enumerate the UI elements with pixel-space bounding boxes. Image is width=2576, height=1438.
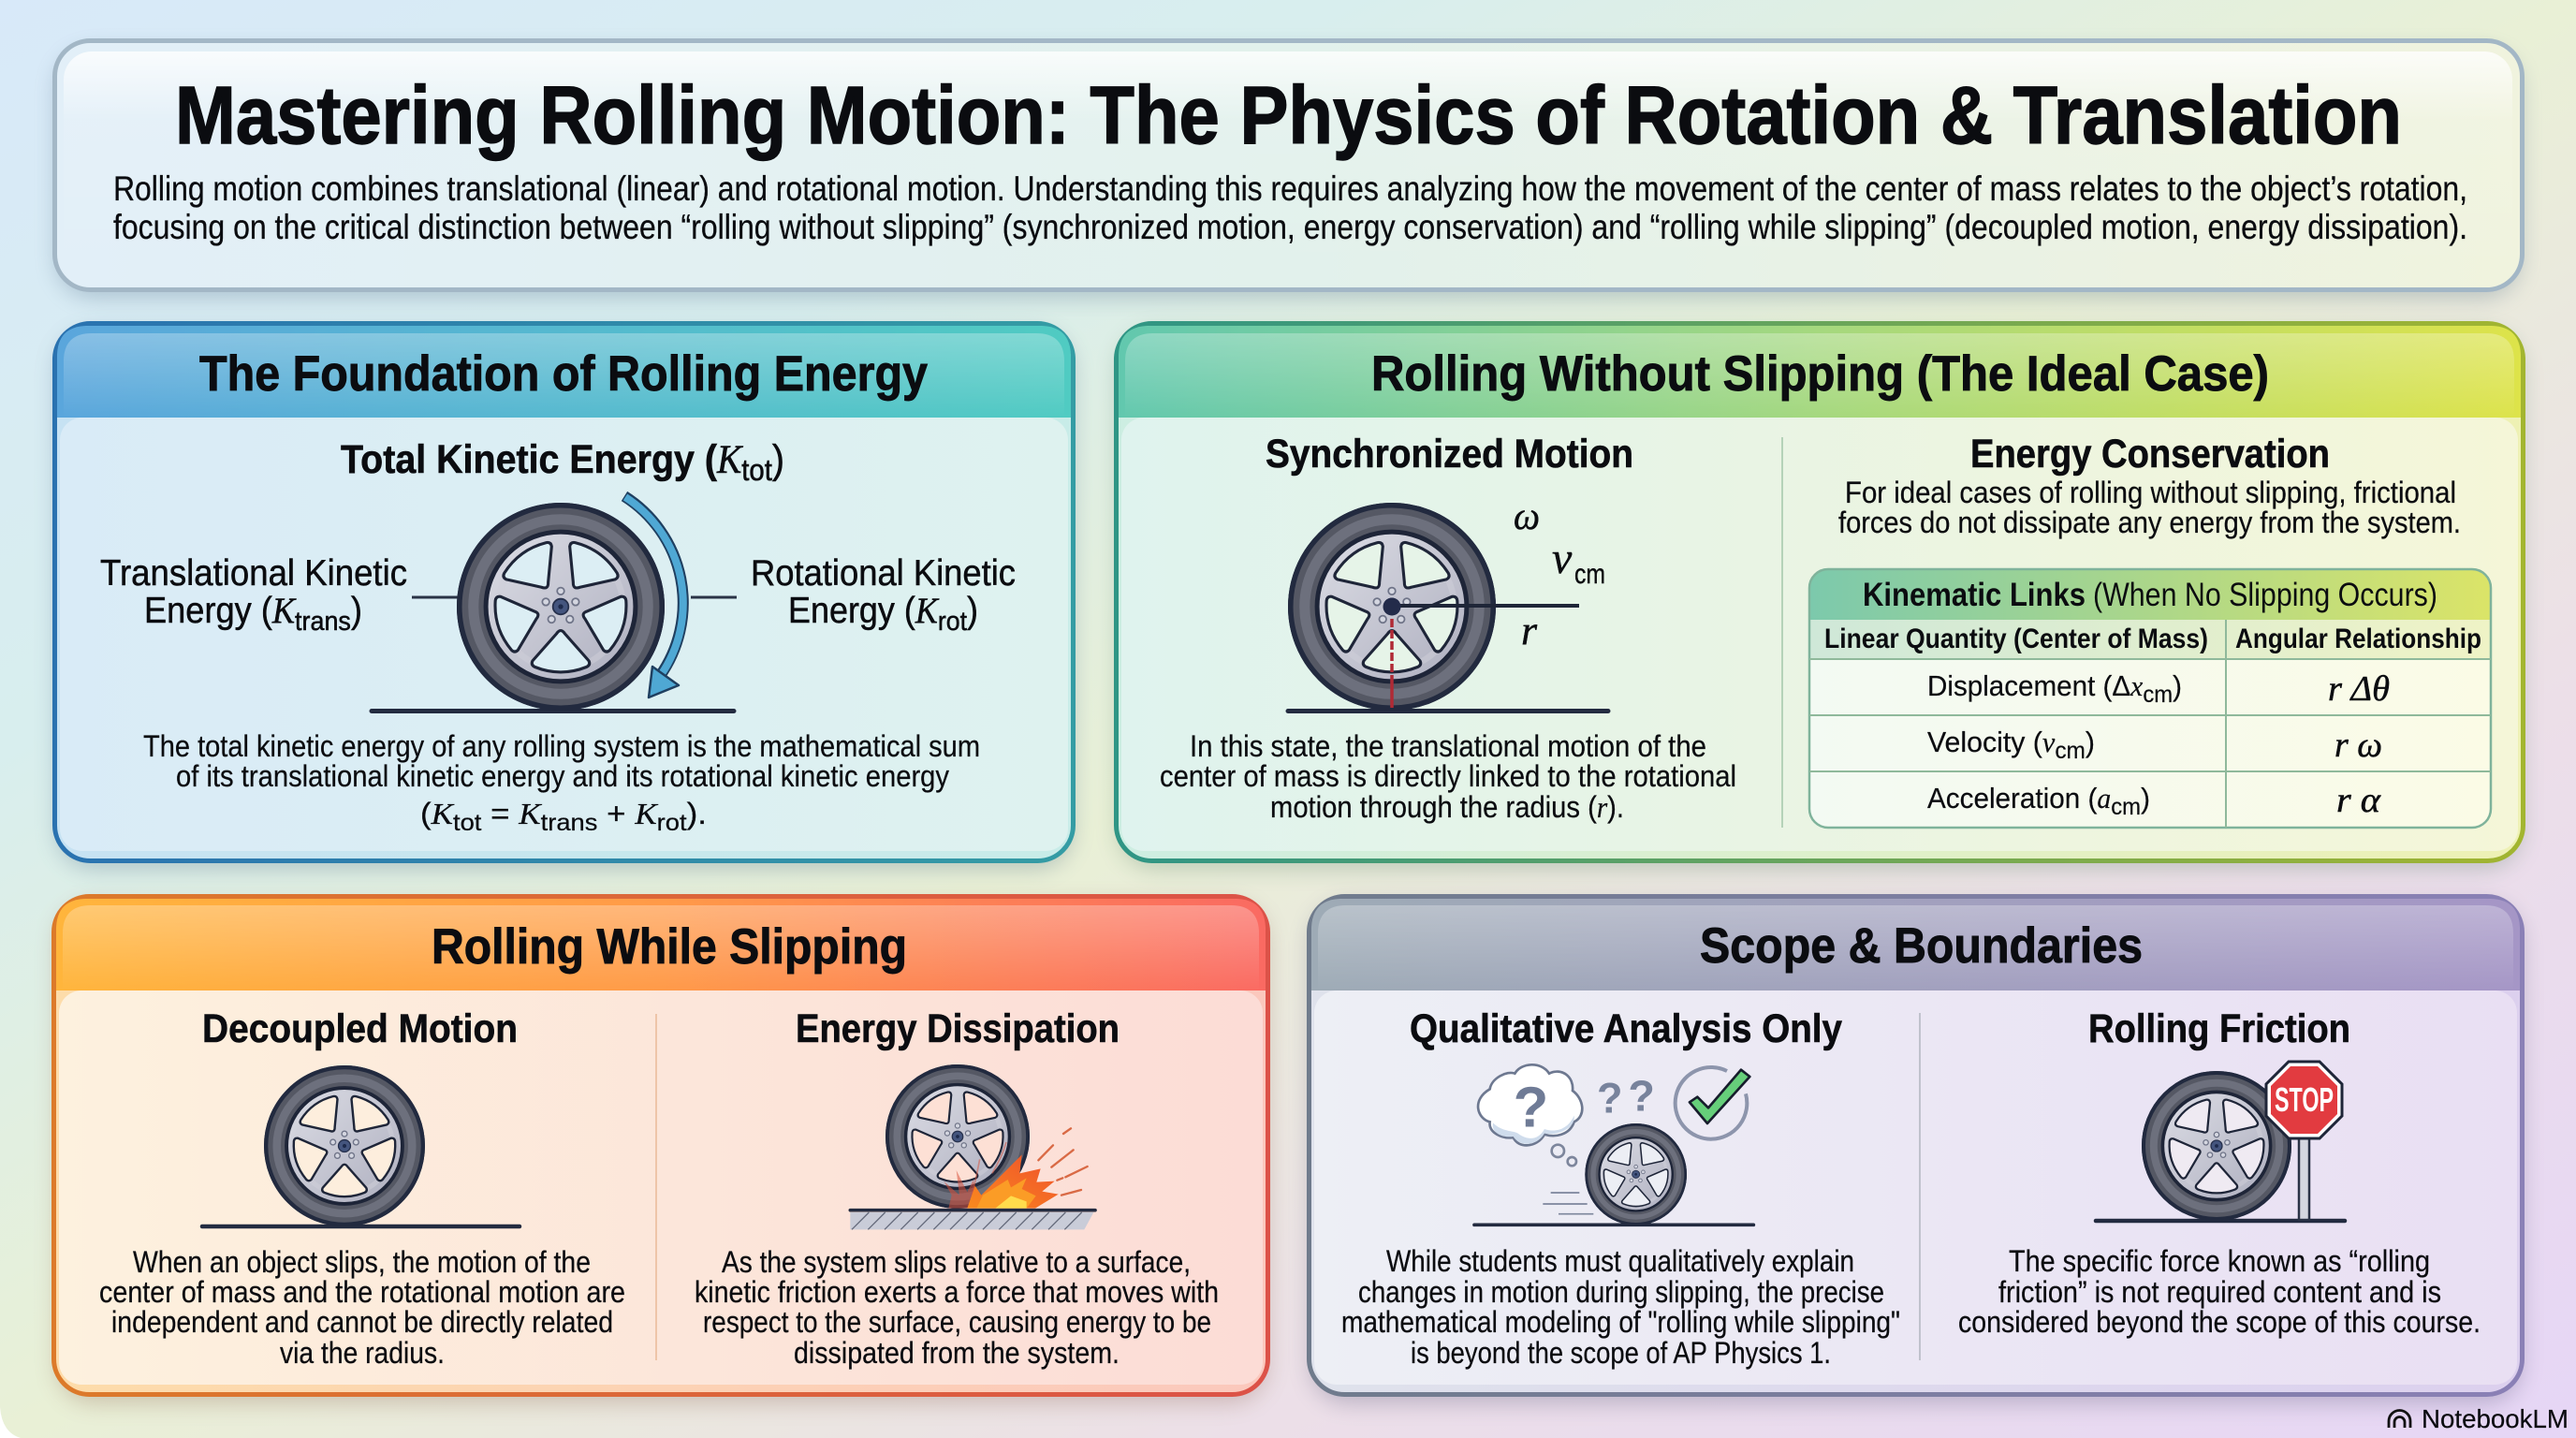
icon: wheel with thought cloud and check: ? [1597, 1074, 1622, 1122]
icon: wheel [887, 1066, 1028, 1207]
text: rolling friction: considered beyond the scope of this course. [1958, 1305, 2481, 1339]
text: rolling friction: The specific force known as “rolling [2009, 1244, 2430, 1278]
label: v cm [1552, 534, 1605, 590]
subheading: energy dissipation: Energy Dissipation [796, 1006, 1120, 1051]
table: kinematic links [1809, 569, 2491, 828]
intro text [113, 169, 2467, 246]
subheading: rolling friction: Rolling Friction [2088, 1006, 2350, 1051]
text: qualitative analysis: is beyond the scope of AP Physics 1. [1411, 1336, 1831, 1370]
row: displacement: cm [2143, 682, 2173, 708]
table title: Kinematic Links [1863, 577, 2086, 613]
label: translational kinetic energy: trans [295, 607, 351, 637]
body text: (K [420, 797, 451, 830]
label: rotational kinetic energy: ) [967, 591, 978, 631]
icon: wheel [460, 506, 662, 708]
text: rolling friction: friction” is not required content and is [1998, 1275, 2441, 1309]
text: decoupled motion [99, 1245, 625, 1370]
subheading: energy conservation: Energy Conservation [1970, 432, 2330, 477]
text: energy dissipation [695, 1245, 1219, 1370]
subheading: total kinetic energy: ) [772, 437, 784, 482]
icon: rotation arrow [624, 496, 683, 697]
body text: ). [687, 797, 707, 830]
heading: Rolling Without Slipping (The Ideal Case) [1371, 346, 2269, 402]
table title [1863, 577, 2437, 613]
heading: The Foundation of Rolling Energy [199, 346, 928, 402]
text: qualitative analysis: mathematical modeling of "rolling while slipping" [1341, 1305, 1900, 1339]
icon: wheel with thought cloud and check: ? [1514, 1075, 1548, 1139]
icon: friction sparks and ground [850, 1128, 1095, 1229]
label: omega: ω [1514, 495, 1540, 538]
label: r: r [1521, 608, 1538, 653]
text: qualitative analysis: changes in motion during slipping, the precise [1358, 1275, 1884, 1309]
text: energy conservation: forces do not dissipate any energy from the system. [1838, 506, 2461, 539]
ground line [2096, 1219, 2345, 1223]
text: decoupled motion: via the radius. [280, 1336, 445, 1370]
body text: The total kinetic energy of any rolling system is the mathematical sum [143, 729, 980, 763]
row: velocity: Velocity (v [1927, 726, 2056, 758]
label: translational kinetic energy [100, 553, 407, 637]
label: rotational kinetic energy: Energy (K [788, 591, 940, 631]
panel: title header [54, 41, 2522, 298]
panel: rolling without slipping [1116, 324, 2524, 869]
row: acceleration: Acceleration (a [1927, 782, 2112, 814]
label: rotational kinetic energy: rot [938, 607, 967, 637]
row: displacement: r Δθ [2328, 669, 2390, 709]
label: translational kinetic energy: Translational Kinetic [100, 553, 407, 594]
body text: tot [453, 810, 481, 836]
icon: stop sign [2266, 1062, 2342, 1220]
body text [1160, 729, 1736, 824]
panel: the foundation of rolling energy [54, 324, 1073, 869]
body text: rot [657, 810, 687, 836]
text: decoupled motion: center of mass and the rotational motion are [99, 1275, 625, 1309]
body text: center of mass is directly linked to the rotational [1160, 759, 1736, 793]
row: velocity [1927, 726, 2382, 765]
ground line [202, 1225, 520, 1228]
body text: motion through the radius (r). [1270, 790, 1624, 824]
text: energy conservation [1838, 476, 2461, 539]
text: energy dissipation: As the system slips relative to a surface, [722, 1245, 1191, 1279]
body text: = [481, 797, 519, 830]
label: rotational kinetic energy [751, 553, 1016, 637]
panel: scope and boundaries [1309, 897, 2522, 1403]
text: qualitative analysis: While students must qualitatively explain [1386, 1244, 1854, 1278]
body text: of its translational kinetic energy and its rotational kinetic energy [176, 759, 949, 793]
body text: trans [541, 810, 597, 836]
text: decoupled motion: When an object slips, the motion of the [133, 1245, 591, 1279]
heading: Rolling While Slipping [432, 919, 907, 975]
heading: Scope & Boundaries [1700, 918, 2143, 974]
label: v cm: cm [1574, 559, 1605, 590]
icon: stop sign: STOP [2275, 1080, 2334, 1119]
row: acceleration: cm [2111, 794, 2141, 820]
label: translational kinetic energy: Energy (K [144, 591, 297, 631]
row: acceleration [1927, 781, 2381, 820]
row: displacement [1927, 669, 2390, 709]
body text: + [597, 797, 635, 830]
label: rotational kinetic energy: Rotational Kinetic [751, 553, 1016, 594]
row: displacement: ) [2173, 669, 2182, 702]
row: acceleration: ) [2141, 782, 2150, 814]
icon: wheel [266, 1067, 423, 1225]
label: translational kinetic energy: ) [351, 591, 362, 631]
column headers [1824, 624, 2481, 654]
column headers: Angular Relationship [2235, 624, 2481, 654]
text: energy dissipation: respect to the surface, causing energy to be [703, 1305, 1211, 1339]
row: velocity: ) [2086, 726, 2095, 758]
panel: rolling while slipping [54, 897, 1267, 1403]
icon: wheel with thought cloud and check: ? [1628, 1072, 1655, 1121]
body text: K [518, 797, 542, 830]
body text: K [634, 797, 659, 830]
row: velocity: r ω [2334, 726, 2382, 765]
text: energy dissipation: kinetic friction exerts a force that moves with [695, 1275, 1219, 1309]
label: v cm: v [1552, 534, 1573, 583]
text: energy conservation: For ideal cases of rolling without slipping, frictional [1845, 476, 2456, 509]
subheading: decoupled motion: Decoupled Motion [202, 1006, 518, 1051]
icon: wheel with thought cloud and check [1474, 1064, 1753, 1225]
column headers: Linear Quantity (Center of Mass) [1824, 624, 2208, 654]
table title: (When No Slipping Occurs) [2093, 577, 2437, 613]
text: rolling friction [1958, 1244, 2481, 1339]
text: qualitative analysis [1341, 1244, 1900, 1370]
connector: left [412, 595, 459, 599]
icon: wheel [2144, 1073, 2290, 1219]
row: velocity: cm [2055, 738, 2086, 764]
text: decoupled motion: independent and cannot be directly related [111, 1305, 613, 1339]
ground line [372, 709, 734, 713]
body text [143, 729, 980, 836]
icon: wheel with radius [1291, 506, 1579, 708]
subheading: synchronized motion: Synchronized Motion [1266, 432, 1633, 477]
subheading: qualitative analysis only: Qualitative Analysis Only [1410, 1006, 1842, 1051]
body text: In this state, the translational motion of the [1190, 729, 1706, 763]
subheading: total kinetic energy: Total Kinetic Energy (K [341, 437, 752, 482]
connector: right [691, 595, 737, 599]
logo: NotebookLM: NotebookLM [2422, 1404, 2569, 1433]
text: energy dissipation: dissipated from the system. [794, 1336, 1120, 1370]
row: displacement: Displacement (Δx [1927, 669, 2144, 702]
row: acceleration: r α [2336, 781, 2381, 820]
subheading: total kinetic energy: tot [741, 453, 772, 487]
ground line [1288, 709, 1608, 713]
